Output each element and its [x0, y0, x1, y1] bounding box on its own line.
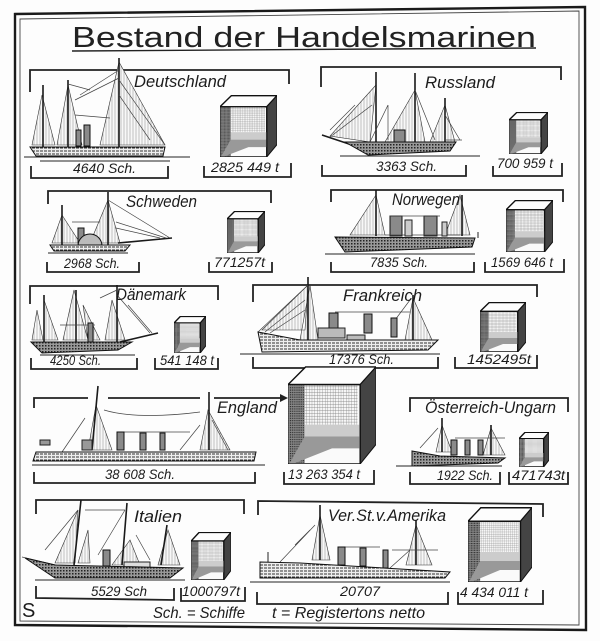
name: Dänemark: Dänemark [116, 285, 187, 304]
tonnage: England: 13 263 354 t [288, 467, 361, 482]
cube: Russland tonnage [509, 112, 548, 154]
ships count: Frankreich: 17376 Sch. [329, 352, 394, 367]
cube: England tonnage [288, 367, 376, 464]
ships count: Österreich-Ungarn: 1922 Sch. [437, 468, 493, 483]
bracket: Deutschland [30, 70, 291, 178]
panel: Frankreich [240, 277, 537, 368]
ships count: Russland: 3363 Sch. [376, 159, 437, 174]
ships count: Amerika: 20707 [339, 584, 381, 599]
legend: Sch. = Schiffe [153, 605, 245, 622]
tonnage: Österreich-Ungarn: 471743t [512, 468, 566, 483]
panel: England [32, 367, 376, 484]
tonnage: Deutschland: 2825 449 t [210, 160, 280, 175]
arrow: England to cube [280, 394, 288, 402]
tonnage: Dänemark: 541 148 t [160, 353, 215, 368]
name: Österreich-Ungarn: Österreich-Ungarn [425, 398, 556, 417]
cube: Amerika tonnage [468, 508, 532, 582]
name: Schweden: Schweden [126, 192, 197, 211]
panel: Norwegen [325, 190, 564, 272]
name: Deutschland: Deutschland [134, 72, 227, 91]
tonnage: Russland: 700 959 t [497, 156, 554, 171]
ships count: Schweden: 2968 Sch. [63, 256, 120, 271]
cube: Italien tonnage [191, 532, 231, 580]
ship: Russland [322, 72, 480, 156]
tonnage: Norwegen: 1569 646 t [491, 255, 554, 270]
ship: Österreich-Ungarn [396, 418, 505, 466]
name: Amerika: Ver.St.v.Amerika [328, 506, 446, 525]
bracket: Frankreich [253, 285, 537, 368]
panel: Italien [22, 500, 245, 601]
name: England: England [217, 398, 278, 417]
name: Frankreich: Frankreich [343, 286, 422, 305]
panel: Dänemark [30, 285, 218, 369]
ship: Amerika [250, 505, 450, 582]
panel: Österreich-Ungarn [396, 398, 568, 484]
name: Italien: Italien [134, 507, 182, 526]
tonnage: Italien: 1000797t [182, 584, 241, 599]
legend [153, 605, 425, 622]
bracket: Dänemark [30, 286, 218, 369]
cube: Norwegen tonnage [506, 201, 553, 252]
ship: Schweden [48, 192, 172, 253]
tonnage: Schweden: 771257t [214, 255, 266, 270]
panel: Russland [321, 67, 562, 176]
cube: Dänemark tonnage [174, 316, 206, 353]
panel: Schweden [47, 191, 272, 272]
panel: Deutschland [24, 58, 291, 178]
bracket: Norwegen [331, 190, 564, 272]
ships count: Deutschland: 4640 Sch. [73, 161, 136, 176]
ship: Frankreich [240, 277, 440, 354]
title: Bestand der Handelsmarinen [72, 22, 536, 54]
ships count: Italien: 5529 Sch [91, 584, 147, 599]
ships count: England: 38 608 Sch. [105, 467, 175, 482]
ship: Italien [22, 500, 185, 580]
cube: Schweden tonnage [227, 211, 265, 253]
name: Russland: Russland [425, 73, 496, 92]
bracket: Amerika [257, 501, 543, 604]
ships count: Norwegen: 7835 Sch. [370, 255, 428, 270]
tonnage: Amerika: 4 434 011 t [460, 585, 529, 600]
monogram: S [22, 600, 35, 622]
ship: Norwegen [325, 190, 478, 254]
tonnage: Frankreich: 1452495t [467, 352, 532, 367]
cube: Frankreich tonnage [480, 302, 526, 352]
bracket: Schweden [47, 191, 272, 272]
cube: Österreich-Ungarn tonnage [519, 432, 549, 467]
bracket: Österreich-Ungarn [410, 398, 568, 484]
bracket: Italien [36, 500, 245, 601]
ship: Deutschland [24, 58, 190, 161]
panel: Ver. St. v. Amerika [250, 501, 543, 604]
legend: t = Registertons netto [272, 605, 425, 622]
bracket: England [34, 398, 374, 484]
cube: Deutschland tonnage [220, 96, 277, 157]
name: Norwegen: Norwegen [392, 190, 460, 209]
bracket: Russland [321, 67, 562, 176]
ship: England [32, 386, 265, 465]
ships count: Dänemark: 4250 Sch. [50, 353, 101, 368]
ship: Dänemark [31, 285, 158, 355]
